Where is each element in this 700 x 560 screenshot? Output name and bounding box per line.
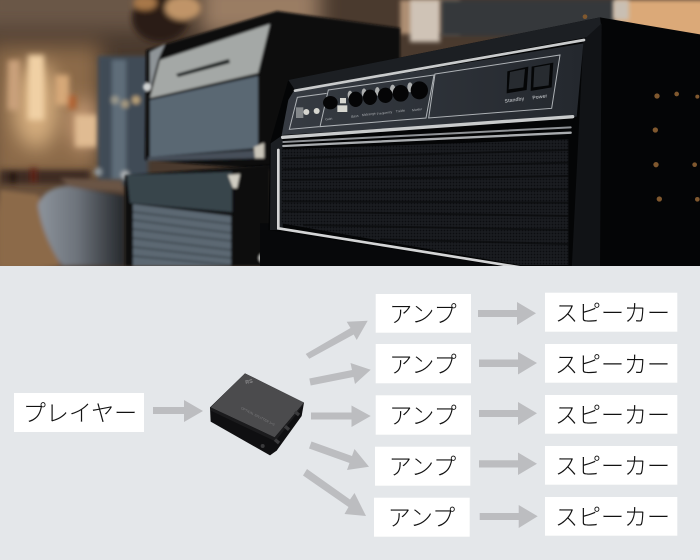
box: amp 3 [376, 395, 471, 435]
panel labels: Bass [351, 114, 359, 119]
panel labels: Frequency [376, 110, 393, 116]
arrow: amp 4 to speaker 4 [479, 452, 537, 475]
knobs [323, 81, 428, 109]
arrow: splitter to amp 3 [311, 406, 371, 427]
arrow: splitter to amp 2 [309, 363, 371, 386]
control panel [282, 43, 583, 135]
icon: audio splitter device [210, 373, 304, 455]
panel labels: Midrange [362, 111, 376, 117]
box: speaker 2: スピーカー [555, 352, 670, 378]
diagram background [0, 266, 700, 560]
photo: guitar amplifiers in a music shop [0, 0, 700, 285]
arrow: splitter to amp 1 [306, 321, 368, 359]
box: speaker 3 [545, 395, 677, 434]
panel labels [325, 93, 548, 121]
box: amp 3: アンプ [389, 402, 457, 428]
panel labels: Master [412, 107, 423, 112]
arrow: amp 1 to speaker 1 [478, 302, 536, 325]
speaker grille [282, 139, 568, 265]
knob highlights [348, 82, 413, 99]
amp case [268, 17, 700, 224]
photo: lower speaker cabinet [125, 165, 270, 266]
box: speaker 3: スピーカー [555, 402, 670, 428]
box: speaker 4 [545, 446, 677, 485]
photo background: blurred shop interior [0, 0, 700, 285]
box: amp 1: アンプ [389, 301, 457, 327]
box: amp 5: アンプ [388, 504, 455, 530]
box: speaker 5 [545, 497, 677, 536]
photo: blurred blue-grey column [94, 56, 148, 186]
arrow: amp 3 to speaker 3 [479, 402, 537, 425]
arrow: amp 2 to speaker 2 [479, 352, 537, 374]
floor of the shelf under the amp [260, 224, 500, 266]
box: player [14, 393, 144, 432]
box: player: プレイヤー [23, 400, 137, 426]
photo: middle amplifier head [143, 11, 400, 170]
box: amp 1 [376, 294, 471, 333]
panel labels: Power [532, 93, 548, 101]
chrome trim strips [278, 40, 584, 267]
small switches and jacks [296, 98, 347, 118]
panel labels: Standby [504, 96, 525, 105]
panel labels: Treble [396, 108, 406, 114]
arrow: splitter to amp 5 [303, 469, 366, 516]
panel labels: Gain [325, 117, 333, 121]
box: amp 4: アンプ [389, 454, 456, 480]
box: amp 2: アンプ [389, 352, 457, 378]
box: speaker 1: スピーカー [555, 300, 670, 326]
area between panel and grille [270, 135, 283, 230]
box: speaker 5: スピーカー [555, 504, 670, 530]
photo: blurred couch [0, 178, 125, 266]
box: amp 4 [375, 447, 470, 486]
box: speaker 4: スピーカー [555, 453, 670, 479]
device logo: RS [245, 379, 254, 386]
arrow: amp 5 to speaker 5 [480, 505, 538, 528]
arrow: splitter to amp 4 [309, 442, 369, 470]
device caption: OPTICAL SPLITTER 1×5 [240, 406, 276, 427]
arrow: player to splitter [153, 400, 203, 422]
photo: main amplifier head [260, 14, 700, 270]
box: speaker 2 [545, 344, 677, 383]
box: speaker 1 [545, 293, 677, 332]
rocker switches [507, 63, 553, 93]
box: amp 5 [374, 498, 470, 537]
cabinet corner rivets [583, 14, 700, 202]
box: amp 2 [376, 344, 471, 383]
panel outline inlays [289, 55, 560, 129]
